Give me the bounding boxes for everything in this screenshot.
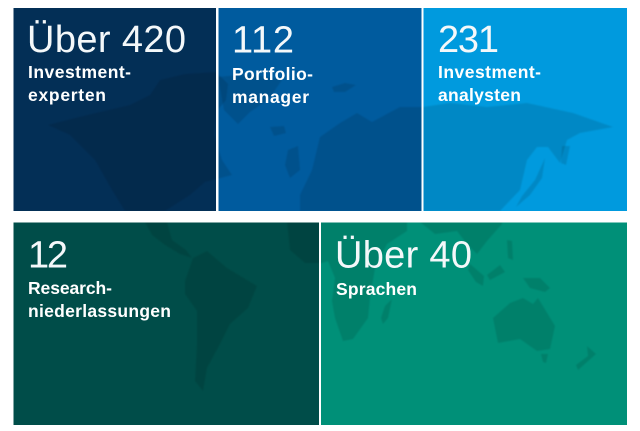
label: Researchniederlassungen: Research- (28, 278, 112, 298)
label: Investmentexperten: experten (28, 85, 106, 105)
label: Investmentexperten (28, 62, 131, 105)
label: Sprachen: Sprachen (336, 279, 417, 299)
number: Über 40: Über 40 (335, 234, 472, 276)
panel: Investmentanalysten background (424, 8, 627, 211)
number: 112: 112 (232, 20, 294, 62)
number: 231: 231 (438, 19, 499, 61)
stat: Über 40 Sprachen (335, 234, 472, 299)
label: Portfoliomanager (232, 64, 313, 107)
stat: 231 Investmentanalysten (438, 19, 541, 105)
number: 12: 12 (28, 234, 68, 276)
stat: 12 Researchniederlassungen (28, 234, 171, 321)
label: Portfoliomanager: Portfolio- (232, 64, 313, 84)
stat: 112 Portfoliomanager (232, 20, 313, 107)
stat: Über 420 Investmentexperten (27, 19, 186, 105)
panel: Researchniederlassungen background (14, 222, 319, 425)
number: Über 420: Über 420 (27, 19, 186, 61)
panel: Sprachen background (321, 222, 627, 425)
panel: Portfoliomanager background (218, 8, 422, 211)
label: Investmentanalysten (438, 62, 541, 105)
label: Investmentanalysten: Investment- (438, 62, 541, 82)
label: Researchniederlassungen: niederlassungen (28, 301, 171, 321)
panel: Investmentexperten background (14, 8, 216, 211)
label: Investmentexperten: Investment- (28, 62, 131, 82)
label: Investmentanalysten: analysten (438, 85, 521, 105)
label: Researchniederlassungen (28, 278, 171, 321)
label: Portfoliomanager: manager (232, 87, 309, 107)
world map (48, 72, 613, 391)
